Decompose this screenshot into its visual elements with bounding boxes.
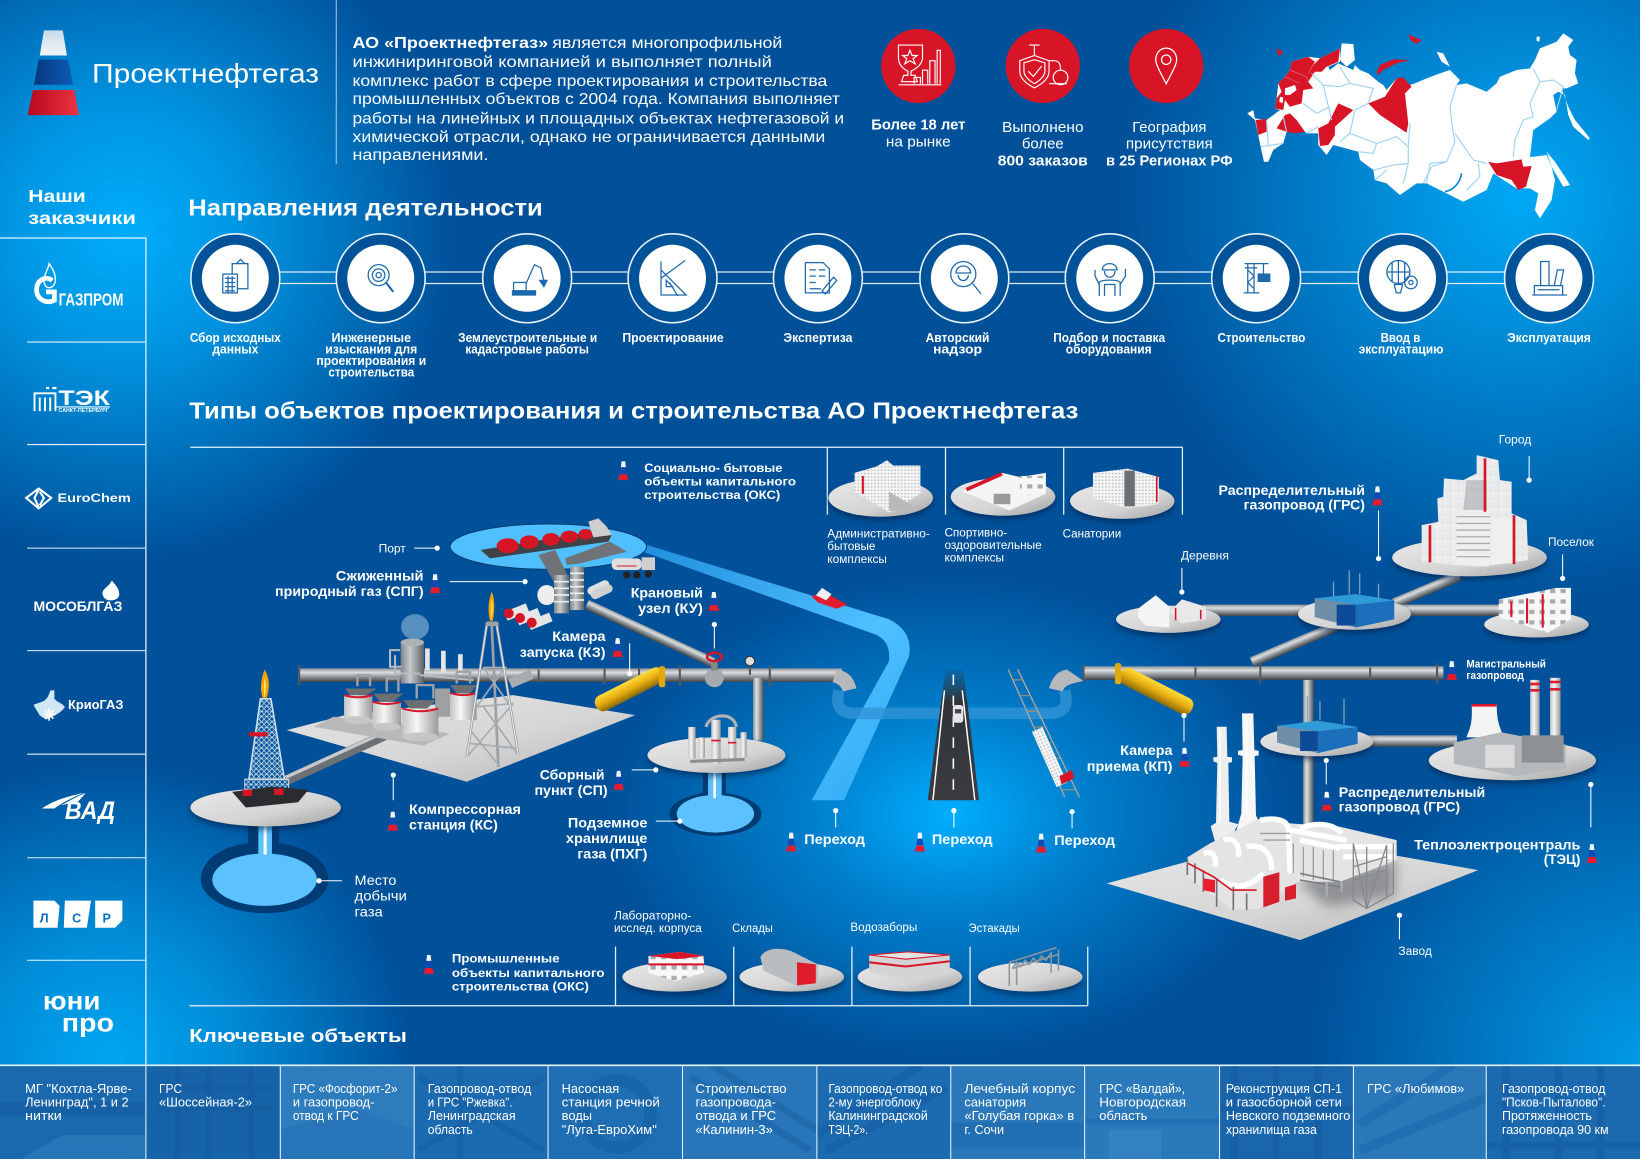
object 8: г. Сочи [964, 1123, 1004, 1137]
label: порт [379, 543, 440, 555]
label: социально-бытовые объекты: Социально- бытовые [644, 461, 783, 475]
object 12 [1502, 1082, 1609, 1137]
object 10: и газосборной сети [1226, 1096, 1342, 1110]
heading: Наши заказчики [28, 186, 136, 228]
label: место добычи газа: добычи [355, 888, 407, 904]
columns [688, 716, 747, 764]
building: водозаборы [850, 922, 962, 992]
object 8: санатория [964, 1096, 1026, 1110]
building: административно-бытовые комплексы [827, 460, 933, 566]
building: эстакады [969, 923, 1083, 992]
flags and labels [275, 435, 1597, 958]
logo: Юнипро: юни [43, 985, 100, 1015]
factory [1107, 713, 1478, 940]
logo: Мособлгаз [33, 581, 122, 614]
object 12: Газопровод-отвод [1502, 1082, 1606, 1096]
building: санатории [1063, 469, 1175, 541]
object 4: и ГРС "Ржевка". [428, 1096, 513, 1110]
pipe: to city [1392, 571, 1462, 608]
logo: ТЭК: ТЭК [59, 387, 110, 410]
label: переход река [786, 808, 865, 851]
railway crossing [1008, 669, 1079, 797]
stat: regions: География [1132, 120, 1206, 136]
building: административно-бытовые комплексы: комплексы [827, 554, 887, 566]
company description: химической отрасли, однако не ограничивается данными [352, 129, 825, 146]
heading: Направления деятельности: Направления деятельности [188, 195, 543, 221]
pipe into station [285, 724, 403, 780]
building: лабораторные корпуса [614, 910, 727, 992]
label: завод: Завод [1398, 946, 1432, 958]
label: СП: Сборный [540, 766, 605, 782]
logo: Мособлгаз: МОСОБЛГАЗ [33, 599, 122, 614]
stacks [1211, 713, 1263, 842]
label: СПГ: природный газ (СПГ) [275, 583, 424, 599]
step: инженерные изыскания: изыскания для [325, 343, 417, 357]
building: административно-бытовые комплексы: Административно- [827, 529, 930, 541]
label: магистральный газопровод [1447, 658, 1546, 682]
logo: Газпром [37, 264, 123, 309]
step: сбор исходных данных: Сбор исходных [190, 331, 281, 345]
label: КС: Компрессорная [409, 801, 521, 817]
object 5: Насосная [562, 1082, 619, 1096]
CHP plant [1429, 678, 1596, 780]
label: КУ: Крановый [631, 584, 703, 600]
label: ТЭЦ: (ТЭЦ) [1544, 851, 1580, 867]
pipe: LNG plant to main [585, 600, 715, 667]
logo: ВАД: ВАД [65, 797, 115, 825]
step: эксплуатация [1505, 234, 1593, 345]
label: ТЭЦ [1414, 782, 1597, 867]
label: ТЭЦ: Теплоэлектроцентраль [1414, 836, 1581, 852]
label: социально-бытовые объекты [618, 461, 796, 502]
logo: Юнипро [43, 985, 114, 1037]
object 5: станция речной [562, 1096, 660, 1110]
pipe: trunk to GRS [1250, 616, 1350, 667]
object 1: МГ "Кохтла-Ярве- [25, 1082, 132, 1096]
branch pipe [510, 674, 532, 683]
building: водозаборы: Водозаборы [850, 922, 917, 934]
object 3: и газопровод- [293, 1096, 374, 1110]
company description: работы на линейных и площадных объектах нефтегазовой и [352, 110, 844, 127]
label: СП: пункт (СП) [534, 782, 608, 798]
label: ГРС нижний: Распределительный [1339, 784, 1485, 800]
object 4 [428, 1082, 532, 1137]
gas field: rig [190, 669, 341, 913]
label: деревня [1179, 551, 1229, 595]
label: ГРС верхний [1218, 482, 1383, 561]
label: промышленные объекты: Промышленные [452, 951, 560, 965]
label: ПХГ: газа (ПХГ) [577, 846, 647, 862]
company description [352, 35, 844, 164]
object 6: «Калинин-3» [696, 1123, 773, 1137]
platform shadow [1297, 860, 1397, 907]
label: ПХГ [566, 814, 682, 862]
GRS lower [1260, 696, 1373, 756]
logo: EuroChem: EuroChem [58, 493, 131, 505]
logo: Проектнефтегаз: Проектнефтегаз [92, 58, 319, 89]
stat: orders completed: Выполнено [1002, 120, 1084, 136]
object 9 [1099, 1082, 1186, 1123]
label: промышленные объекты [424, 951, 605, 994]
object 3: ГРС «Фосфорит-2» [293, 1082, 397, 1096]
label: магистральный газопровод: газопровод [1466, 670, 1524, 682]
label: промышленные объекты: объекты капитального [452, 966, 605, 980]
step: инженерные изыскания: строительства [328, 366, 415, 380]
step: проектирование: Проектирование [622, 331, 724, 345]
step: строительство [1212, 234, 1306, 345]
road crossing [928, 669, 979, 800]
object 9: Новгородская [1099, 1096, 1186, 1110]
logo: КриоГАЗ [33, 690, 124, 721]
label: порт: Порт [379, 543, 407, 555]
steam [401, 614, 429, 639]
label: КП: Камера [1120, 742, 1173, 758]
key objects strip [0, 1065, 1640, 1159]
label: КС [388, 772, 521, 832]
river [636, 543, 910, 800]
building: спортивно-оздоровительные комплексы [944, 473, 1055, 565]
building: спортивно-оздоровительные комплексы: комплексы [944, 553, 1004, 565]
object 8 [964, 1082, 1075, 1137]
company description: АО «Проектнефтегаз» [352, 35, 548, 52]
label: ГРС нижний: газопровод (ГРС) [1339, 799, 1460, 815]
compressor station [285, 592, 635, 782]
object 1: нитки [25, 1109, 62, 1123]
label: КЗ: Камера [552, 628, 606, 644]
truck [612, 557, 655, 579]
logo: Газпром: ГАЗПРОМ [59, 289, 123, 309]
label: ГРС нижний [1322, 758, 1485, 815]
label: СПГ: Сжиженный [336, 568, 424, 584]
label: КП: приема (КП) [1087, 758, 1172, 774]
label: поселок: Поселок [1548, 537, 1595, 549]
object 2: ГРС [159, 1082, 182, 1096]
heading: Ключевые объекты: Ключевые объекты [189, 1025, 407, 1046]
logo: ЛСР [33, 901, 122, 928]
object 9: ГРС «Валдай», [1099, 1082, 1185, 1096]
logo: ЛСР: С [72, 912, 81, 926]
stat: years on market: Более 18 лет [871, 118, 965, 134]
label: место добычи газа: Место [355, 872, 397, 888]
object 7: Газопровод-отвод ко [828, 1082, 942, 1096]
label: КЗ [520, 628, 632, 676]
object 12: "Псков-Пыталово". [1502, 1096, 1605, 1110]
company description: направлениями. [352, 147, 488, 164]
object 10: хранилища газа [1226, 1123, 1317, 1137]
step: сбор исходных данных: данных [212, 343, 258, 357]
photo textures [0, 1065, 1640, 1159]
frame: social facilities [190, 447, 1183, 515]
receiving chamber [1115, 663, 1196, 717]
label: социально-бытовые объекты: объекты капитального [644, 474, 796, 488]
object 10: Реконструкция СП-1 [1226, 1082, 1342, 1096]
underground pipe [838, 690, 1066, 713]
process column [345, 638, 477, 708]
frame: industrial facilities [189, 947, 1088, 1006]
step: экспертиза [773, 234, 862, 345]
logo: КриоГАЗ: КриоГАЗ [68, 698, 124, 712]
building: склады: Склады [732, 923, 773, 935]
pipe: GRS to CHP [1358, 735, 1457, 747]
label: переход дорога: Переход [932, 831, 993, 847]
stat: regions: в 25 Регионах РФ [1106, 153, 1233, 169]
building: спортивно-оздоровительные комплексы: оздоровительные [944, 540, 1042, 552]
step: подбор и поставка оборудования [1053, 234, 1166, 357]
object 5: воды [562, 1109, 592, 1123]
city [1392, 455, 1547, 576]
label: магистральный газопровод: Магистральный [1466, 658, 1546, 670]
object 7: ТЭЦ-2». [828, 1123, 868, 1137]
object 12: Протяженность [1502, 1109, 1592, 1123]
main pipe right [1049, 663, 1443, 691]
label: деревня: Деревня [1181, 551, 1229, 563]
label: КП [1087, 713, 1190, 774]
object 7: 2-му энергоблоку [828, 1096, 922, 1110]
step: экспертиза: Экспертиза [783, 331, 853, 345]
icon: trophy with bars [898, 45, 941, 85]
object 10: Невского подземного [1226, 1109, 1350, 1123]
label: место добычи газа: газа [355, 903, 383, 919]
object 1: Ленинград", 1 и 2 [25, 1096, 129, 1110]
object 10 [1226, 1082, 1350, 1137]
label: СПГ [275, 568, 528, 599]
step: ввод в эксплуатацию [1358, 234, 1447, 357]
icon: map pin [1156, 48, 1177, 84]
step: землеустроительные работы: Землеустроительные и [458, 331, 597, 345]
pipe: trunk down [1303, 680, 1314, 826]
ship [812, 588, 847, 609]
object 2: «Шоссейная-2» [159, 1096, 252, 1110]
building: лабораторные корпуса: исслед. корпуса [614, 923, 702, 935]
LNG plant [504, 567, 614, 630]
step: сбор исходных данных [190, 234, 281, 357]
building: эстакады: Эстакады [969, 923, 1020, 935]
header divider [336, 0, 337, 164]
label: переход дорога [915, 808, 993, 851]
step: авторский надзор [920, 234, 1009, 357]
building: спортивно-оздоровительные комплексы: Спортивно- [944, 528, 1007, 540]
building: лабораторные корпуса: Лабораторно- [614, 910, 692, 922]
step: подбор и поставка оборудования: оборудования [1066, 343, 1152, 357]
step: землеустроительные работы: кадастровые работы [465, 343, 589, 357]
building: административно-бытовые комплексы: бытовые [827, 541, 875, 553]
yellow launch chamber [592, 665, 667, 714]
label: КЗ: запуска (КЗ) [520, 644, 606, 660]
GRS upper [1298, 570, 1411, 630]
company description: промышленных объектов с 2004 года. Компания выполняет [352, 91, 840, 108]
step: землеустроительные работы [458, 234, 597, 357]
step: эксплуатация: Эксплуатация [1507, 331, 1591, 345]
object 4: Ленинградская [428, 1109, 516, 1123]
logo: ТЭК [35, 387, 110, 414]
heading: Наши заказчики: Наши [28, 186, 86, 206]
logo: Юнипро: про [62, 1007, 114, 1037]
object 4: область [428, 1123, 473, 1137]
flare tower [467, 592, 518, 767]
building: склады [732, 923, 844, 992]
step: проектирование [622, 234, 724, 345]
label: ГРС верхний: Распределительный [1218, 482, 1365, 498]
label: город: Город [1499, 435, 1532, 447]
label: место добычи газа [316, 872, 407, 919]
label: город [1499, 435, 1532, 483]
step: строительство: Строительство [1217, 331, 1306, 345]
port with LNG ship [450, 518, 655, 587]
stat: orders completed: 800 заказов [998, 153, 1088, 169]
object 6 [696, 1082, 787, 1137]
logo: Проектнефтегаз [28, 30, 319, 115]
step: авторский надзор: Авторский [926, 331, 989, 345]
object 6: отвода и ГРС [696, 1109, 776, 1123]
object 9: область [1099, 1109, 1148, 1123]
process chain: activities [190, 234, 1593, 380]
object 5 [562, 1082, 660, 1137]
label: КС: станция (КС) [409, 816, 498, 832]
step: инженерные изыскания: проектирования и [316, 354, 426, 368]
object 6: газопровода- [696, 1096, 776, 1110]
step: авторский надзор: надзор [933, 343, 982, 357]
logo: ТЭК: САНКТ-ПЕТЕРБУРГ [59, 408, 109, 414]
object 7 [828, 1082, 942, 1137]
rig tower [232, 669, 309, 808]
stat: orders completed: более [1022, 137, 1064, 153]
company description: инжиниринговой компанией и выполняет полный [352, 54, 772, 71]
label: завод [1397, 913, 1432, 958]
object 1 [25, 1082, 132, 1123]
step: ввод в эксплуатацию: эксплуатацию [1359, 343, 1444, 357]
object 4: Газопровод-отвод [428, 1082, 532, 1096]
object 12: газопровода 90 км [1502, 1123, 1609, 1137]
step: инженерные изыскания [316, 234, 426, 380]
process block [1187, 818, 1397, 910]
valve and gauge [705, 653, 755, 687]
logo: ВАД [42, 793, 115, 825]
map of Russia [1247, 33, 1590, 218]
logo: EuroChem [26, 489, 131, 508]
company description: комплекс работ в сфере проектирования и строительства [352, 73, 828, 90]
label: переход река: Переход [804, 831, 865, 847]
object 8: «Голубая горка» в [964, 1109, 1075, 1123]
object 7: Калининградской [828, 1109, 928, 1123]
pipe: to collection point [753, 678, 764, 741]
main pipe left [298, 665, 857, 691]
collection point [647, 716, 785, 836]
object 8: Лечебный корпус [964, 1082, 1075, 1096]
label: переход железная дорога: Переход [1054, 832, 1115, 848]
label: ПХГ: Подземное [568, 814, 648, 830]
object 3: отвод к ГРС [293, 1109, 359, 1123]
step: инженерные изыскания: Инженерные [332, 331, 411, 345]
label: ПХГ: хранилище [566, 830, 648, 846]
label: КУ [631, 584, 719, 649]
stat: regions: присутствия [1126, 137, 1213, 153]
object 11: ГРС «Любимов» [1367, 1082, 1464, 1096]
building: санатории: Санатории [1063, 529, 1121, 541]
stat: orders completed [998, 29, 1088, 169]
label: СП [534, 766, 658, 798]
object 2 [159, 1082, 252, 1110]
icon: shield with check and pipe [1020, 45, 1068, 88]
object 6: Строительство [696, 1082, 787, 1096]
label: ГРС верхний: газопровод (ГРС) [1244, 496, 1365, 512]
label: поселок [1548, 537, 1595, 581]
stat: years on market: на рынке [886, 134, 951, 150]
step: подбор и поставка оборудования: Подбор и поставка [1053, 331, 1166, 345]
logo: ЛСР: Р [103, 912, 111, 926]
heading: Типы объектов: Типы объектов проектирования и строительства АО Проектнефтегаз [189, 397, 1078, 423]
village [1116, 595, 1221, 633]
stat: years on market [871, 29, 965, 150]
logo: ЛСР: Л [40, 912, 49, 926]
pipe: village to settlement [1203, 605, 1501, 616]
label: переход железная дорога [1036, 809, 1115, 852]
tanks [313, 688, 477, 746]
LNG ship [481, 518, 612, 558]
object 3 [293, 1082, 397, 1123]
label: промышленные объекты: строительства (ОКС) [452, 980, 589, 994]
panel: customers [0, 186, 146, 1065]
stat: regions [1106, 29, 1233, 169]
object 5: "Луга-ЕвроХим" [562, 1123, 657, 1137]
step: ввод в эксплуатацию: Ввод в [1381, 331, 1421, 345]
label: социально-бытовые объекты: строительства (ОКС) [644, 488, 780, 502]
label: КУ: узел (КУ) [638, 600, 703, 616]
jetty [538, 542, 627, 587]
heading: Наши заказчики: заказчики [28, 208, 136, 228]
company description: является многопрофильной [552, 35, 782, 52]
settlement [1484, 588, 1589, 638]
